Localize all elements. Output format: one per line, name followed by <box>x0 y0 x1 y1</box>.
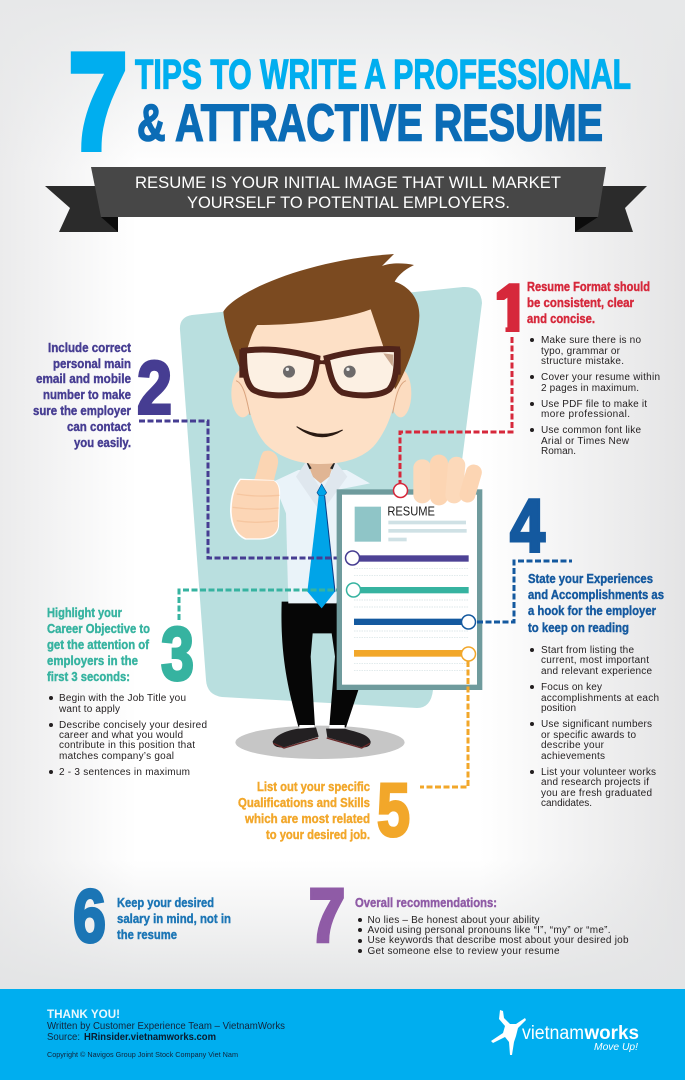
character <box>223 254 419 759</box>
number 7: 7 <box>309 874 345 958</box>
tip 2 <box>33 340 172 450</box>
tip 6 heading: the resume <box>117 927 177 942</box>
footer credits: THANK YOU! <box>47 1009 120 1021</box>
footer credits: Copyright © Navigos Group Joint Stock Company Viet Nam <box>47 1050 238 1059</box>
tip 1 heading: be consistent, clear <box>527 295 634 310</box>
tip 7 list: Get someone else to review your resume <box>368 946 560 957</box>
icon: leaping figure <box>491 1010 526 1055</box>
tip 3 list: matches company’s goal <box>59 751 174 762</box>
tip 1 list: more professional. <box>541 409 630 420</box>
number 3: 3 <box>161 612 194 696</box>
footer credits: Source: <box>47 1031 80 1043</box>
head and hair <box>223 254 419 507</box>
tip 2 heading: can contact <box>67 419 132 434</box>
tip 6 <box>73 874 231 958</box>
tip 1 list: structure mistake. <box>541 356 624 367</box>
tip 2 heading: sure the employer <box>33 403 131 418</box>
fist and tie <box>230 479 335 608</box>
tip 4 list: Focus on key <box>541 682 602 693</box>
tip 3 heading: Highlight your <box>47 605 122 620</box>
teal backdrop shape <box>180 287 482 708</box>
tip 6 heading: Keep your desired <box>117 895 214 910</box>
tip 4 heading: a hook for the employer <box>528 603 656 618</box>
tip 4 list: accomplishments at each <box>541 693 659 704</box>
connector: tip 1 <box>400 337 512 484</box>
tip 1 list: typo, grammar or <box>541 346 621 357</box>
tip 4 <box>510 484 664 809</box>
tip 1 heading: Resume Format should <box>527 279 650 294</box>
tip 5 heading: Qualifications and Skills <box>238 795 370 810</box>
vietnamworks logo <box>491 1010 639 1055</box>
footer <box>0 989 685 1080</box>
lower body <box>235 470 405 759</box>
tip 4 list: achievements <box>541 751 605 762</box>
tip 5 heading: to your desired job. <box>266 827 370 842</box>
footer credits: Written by Customer Experience Team – VietnamWorks <box>47 1020 285 1032</box>
tip 5 <box>238 768 410 852</box>
tip 7 <box>309 874 629 958</box>
tip 1 list: Make sure there is no <box>541 335 641 346</box>
tip 1 list: Use common font like <box>541 425 641 436</box>
tip 4 heading: State your Experiences <box>528 571 653 586</box>
banner text <box>135 174 561 212</box>
number 2: 2 <box>137 346 172 430</box>
footer credits: HRinsider.vietnamworks.com <box>84 1031 216 1043</box>
tip 3 list: want to apply <box>58 704 120 715</box>
tip 2 heading <box>33 340 132 450</box>
shirt <box>273 470 370 603</box>
connector: tip 5 <box>420 661 468 787</box>
tip 1 heading <box>527 279 650 326</box>
number 5: 5 <box>377 768 410 852</box>
tip 3 heading: Career Objective to <box>47 621 150 636</box>
tip 4 list <box>530 645 659 809</box>
tip 3 list: Begin with the Job Title you <box>59 693 186 704</box>
number 6: 6 <box>73 874 106 958</box>
tip 4 list: and relevant experience <box>541 666 652 677</box>
tip 2 heading: email and mobile <box>36 371 131 386</box>
holding hand <box>413 455 484 505</box>
tip 6 heading: salary in mind, not in <box>117 911 231 926</box>
tip 7 list <box>358 915 629 957</box>
connector: tip 2 <box>139 421 346 558</box>
number 4: 4 <box>510 484 545 568</box>
tip 1 <box>494 269 660 457</box>
tip 4 list: Start from listing the <box>541 645 634 656</box>
tip 4 heading <box>528 571 664 635</box>
connector: tip 3 <box>179 590 347 620</box>
tip 1 list: Arial or Times New <box>541 436 630 447</box>
tip 2 heading: you easily. <box>74 435 131 450</box>
tip 4 list: position <box>541 703 576 714</box>
tip 1 heading: and concise. <box>527 311 595 326</box>
vietnamworks logo: Move Up! <box>594 1042 638 1053</box>
tip 4 list: and research projects if <box>541 777 649 788</box>
tip 7 list: Avoid using personal pronouns like “I”, “my” or “me”. <box>368 925 610 936</box>
tip 7 list: No lies – Be honest about your ability <box>368 915 540 926</box>
tip 6 heading <box>117 895 231 942</box>
tip 7 list: Use keywords that describe most about your desired job <box>368 935 629 946</box>
tip 3 heading <box>47 605 150 684</box>
tip 1 list: Use PDF file to make it <box>541 399 647 410</box>
hair <box>223 254 419 389</box>
resume label: RESUME <box>387 504 435 519</box>
tip 3 list: career and what you would <box>59 730 183 741</box>
number 1: 1 <box>494 269 530 353</box>
tip 3 heading: employers in the <box>47 653 138 668</box>
tip 1 list: Cover your resume within <box>541 372 660 383</box>
banner text: RESUME IS YOUR INITIAL IMAGE THAT WILL MARKET <box>135 174 561 192</box>
tip 4 heading: and Accomplishments as <box>528 587 664 602</box>
title <box>69 26 631 178</box>
tip 3 list: Describe concisely your desired <box>59 720 207 731</box>
smile <box>297 427 343 437</box>
vietnamworks logo: works <box>584 1023 639 1044</box>
eyes <box>283 366 356 378</box>
tip 2 heading: Include correct <box>48 340 132 355</box>
tip 4 heading: to keep on reading <box>528 620 629 635</box>
tip 4 list: List your volunteer works <box>541 767 656 778</box>
tip 5 heading: List out your specific <box>257 779 370 794</box>
tip 4 list: you are fresh graduated <box>541 788 652 799</box>
tip 2 heading: personal main <box>53 356 131 371</box>
glasses <box>239 349 401 395</box>
tip 1 list: Roman. <box>541 446 576 457</box>
thumb <box>250 451 278 487</box>
tip 4 list: describe your <box>541 740 605 751</box>
tip 4 list: candidates. <box>541 798 592 809</box>
resume document <box>339 492 480 687</box>
tip 3 list <box>49 693 207 778</box>
banner text: YOURSELF TO POTENTIAL EMPLOYERS. <box>187 194 510 212</box>
big number 7: 7 <box>69 26 127 178</box>
logo wordmark: vietnam <box>522 1023 584 1044</box>
tip 5 heading: which are most related <box>244 811 370 826</box>
tip 3 heading: first 3 seconds: <box>47 669 130 684</box>
tip 5 heading <box>238 779 370 842</box>
tip 2 heading: number to make <box>43 387 131 402</box>
tip 3 heading: get the attention of <box>47 637 150 652</box>
connector: tip 4 <box>477 561 572 622</box>
tip 4 list: or specific awards to <box>541 730 636 741</box>
tip 1 list <box>530 335 660 457</box>
footer credits <box>47 1009 285 1059</box>
tip 7 heading: Overall recommendations: <box>355 895 497 910</box>
connector nodes <box>346 484 476 661</box>
tip 4 list: current, most important <box>541 655 649 666</box>
tip 3 <box>47 605 207 778</box>
ribbon banner <box>45 167 647 232</box>
necktie <box>307 484 335 608</box>
tip 1 list: 2 pages in maximum. <box>541 383 639 394</box>
tip 3 list: 2 - 3 sentences in maximum <box>59 767 190 778</box>
tip 4 list: Use significant numbers <box>541 719 652 730</box>
tip 3 list: contribute in this position that <box>59 740 195 751</box>
